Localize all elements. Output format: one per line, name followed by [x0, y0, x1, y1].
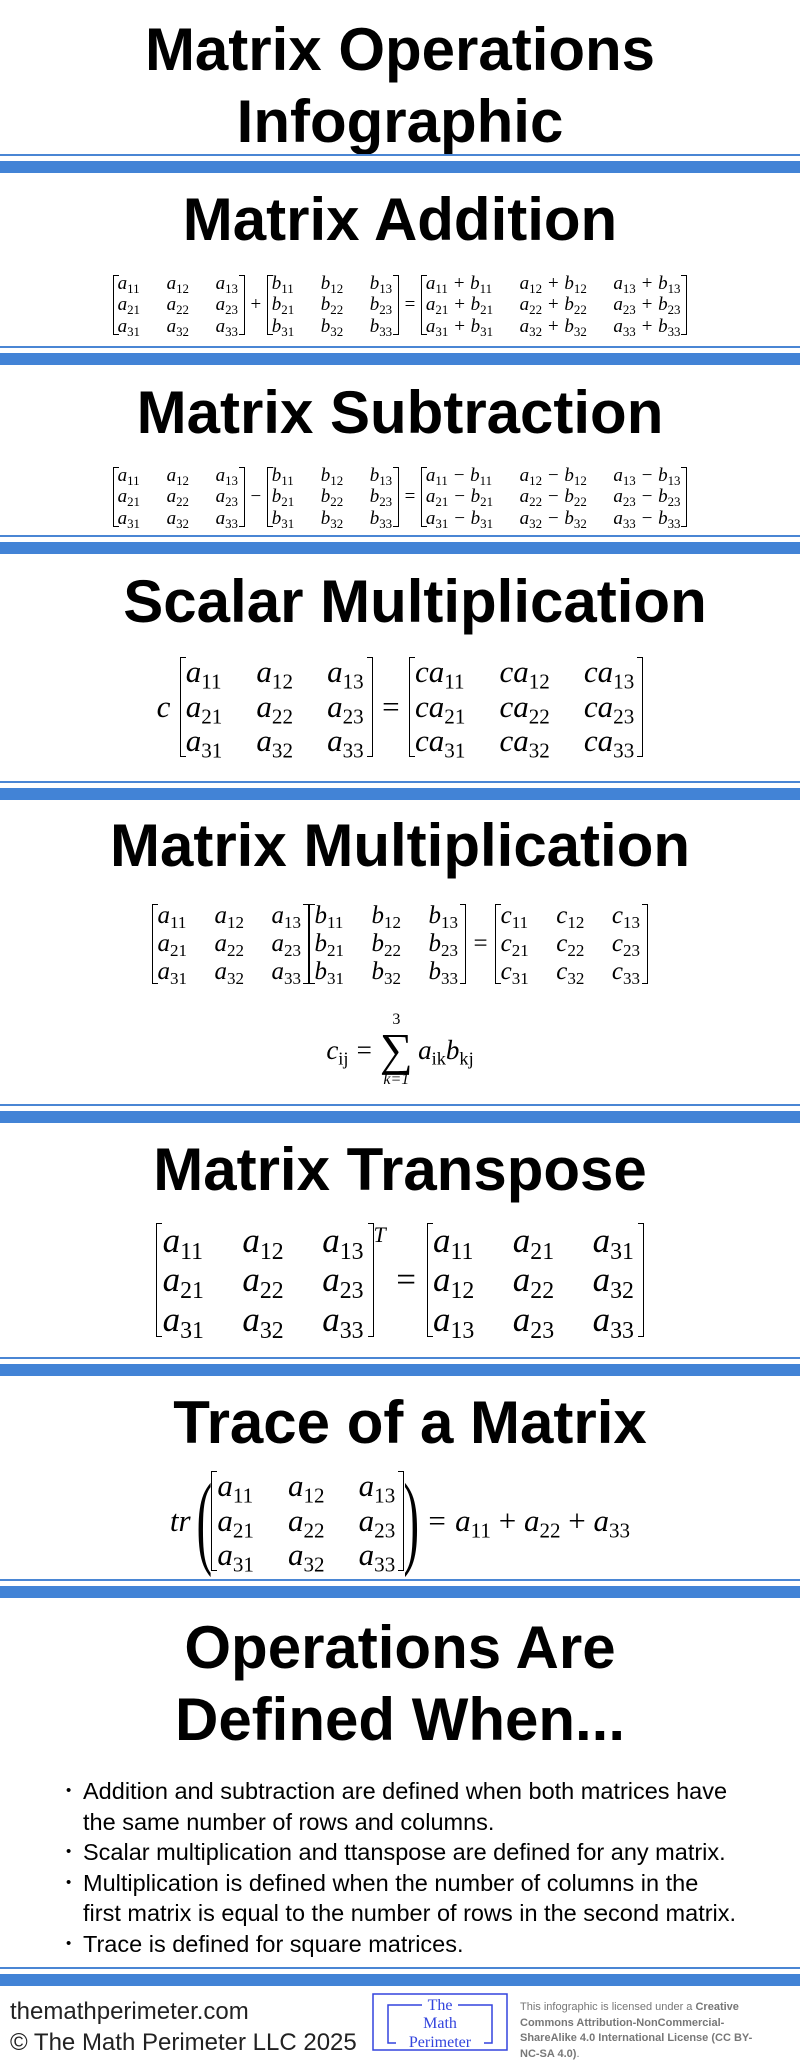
formula: subtraction: a31 − b31 [426, 508, 493, 530]
formula: transpose: a11 [433, 1221, 473, 1265]
formula: addition: a33 [216, 316, 238, 338]
formula: addition: a31 [118, 316, 140, 338]
bullet list: Multiplication is defined when the number of columns in the [83, 1870, 698, 1896]
formula: multiplication: b31 [315, 958, 344, 988]
logo: Math [423, 2015, 457, 2032]
formula: transpose: T [374, 1222, 386, 1247]
formula: scalar: a11 [186, 654, 222, 693]
formula: multiplication: b13 [429, 902, 458, 932]
formula: subtraction: a21 − b21 [426, 486, 493, 509]
formula: multiplication: a11 [158, 902, 186, 932]
formula: subtraction: b13 [370, 465, 392, 488]
formula: scalar: ca23 [584, 689, 634, 728]
footer: site and copyright: © The Math Perimeter LLC 2025 [10, 2029, 357, 2056]
formula: multiplication: b32 [372, 958, 401, 988]
formula: trace: a21 [217, 1503, 254, 1542]
formula: transpose: a22 [513, 1260, 554, 1305]
formula: addition: = [405, 294, 415, 315]
formula: transpose: a31 [163, 1300, 204, 1344]
formula: summation: k=1 [383, 1071, 409, 1088]
formula: addition: a22 [167, 294, 189, 317]
heading: transpose: Matrix Transpose [153, 1136, 647, 1203]
formula: multiplication: b21 [315, 930, 344, 960]
formula: multiplication: b12 [372, 902, 401, 932]
formula: subtraction: a21 [118, 486, 140, 509]
formula: scalar: ca21 [415, 689, 465, 728]
formula: addition: a11 + b11 [426, 273, 492, 296]
formula: scalar: a13 [327, 654, 364, 693]
formula: subtraction: a31 [118, 508, 140, 530]
formula: subtraction: b23 [370, 486, 392, 509]
heading: trace: Trace of a Matrix [173, 1389, 647, 1456]
formula: scalar: c [157, 689, 170, 724]
formula: transpose: a23 [513, 1300, 554, 1344]
heading: addition: Matrix Addition [183, 186, 617, 253]
formula: subtraction: a23 [216, 486, 238, 509]
formula: addition: a21 [118, 294, 140, 317]
formula: multiplication: c12 [556, 902, 584, 932]
formula: addition: b13 [370, 273, 392, 296]
formula: multiplication: = [474, 930, 488, 957]
formula: trace: a32 [288, 1537, 325, 1577]
formula: multiplication: a32 [215, 958, 244, 988]
formula: transpose: a21 [163, 1260, 204, 1305]
formula: transpose: a13 [433, 1300, 474, 1344]
formula: transpose: a13 [322, 1221, 364, 1265]
title: Matrix Operations [145, 16, 655, 83]
formula: addition: a22 + b22 [520, 294, 587, 317]
bullet list: Scalar multiplication and ttanspose are defined for any matrix. [83, 1839, 726, 1865]
formula: subtraction: b31 [272, 508, 294, 530]
formula: subtraction: a13 [216, 465, 238, 488]
formula: addition: a23 + b23 [613, 294, 680, 317]
formula: addition: a13 [216, 273, 238, 296]
formula: summation: 3 [392, 1011, 400, 1028]
formula: scalar: ca22 [499, 689, 550, 728]
formula: subtraction: b22 [321, 486, 343, 509]
formula: multiplication: a33 [272, 958, 301, 988]
formula: subtraction: a12 [167, 465, 189, 488]
formula: multiplication: a12 [215, 902, 244, 932]
formula: scalar: a23 [327, 689, 364, 728]
formula: trace: a12 [288, 1468, 325, 1507]
formula: summation: = [357, 1034, 372, 1064]
formula: subtraction: a33 [216, 508, 238, 530]
formula: multiplication: c33 [612, 958, 640, 988]
formula: addition: a23 [216, 294, 238, 317]
formula: multiplication: c22 [556, 930, 584, 960]
formula: subtraction: a33 − b33 [613, 508, 680, 530]
formula: subtraction: a22 [167, 486, 189, 509]
title [145, 16, 655, 155]
formula: subtraction [113, 465, 687, 530]
heading: conditions: Operations Are [184, 1614, 616, 1681]
formula: subtraction: b12 [321, 465, 343, 488]
formula: addition: b22 [321, 294, 343, 317]
formula: scalar: a12 [256, 654, 293, 693]
formula: multiplication: c31 [501, 958, 529, 988]
heading: multiplication: Matrix Multiplication [110, 812, 690, 879]
formula: subtraction: b32 [321, 508, 343, 530]
formula: addition: a31 + b31 [426, 316, 493, 338]
formula: addition: a33 + b33 [613, 316, 680, 338]
formula: scalar: ca11 [415, 654, 465, 693]
formula: transpose: a33 [593, 1300, 634, 1344]
formula: transpose: a22 [242, 1260, 284, 1305]
formula: summation: cij [326, 1034, 348, 1068]
formula: multiplication: c32 [556, 958, 584, 988]
formula: multiplication: c21 [501, 930, 529, 960]
formula: scalar: ca13 [584, 654, 634, 693]
formula: scalar: a33 [327, 723, 364, 763]
formula: transpose: a23 [322, 1260, 364, 1305]
formula: transpose: a31 [593, 1221, 634, 1265]
formula: trace: ) [404, 1463, 420, 1578]
logo: The [428, 1997, 452, 2014]
formula: transpose: a21 [513, 1221, 554, 1265]
formula: transpose: a11 [163, 1221, 203, 1265]
formula: addition: a13 + b13 [613, 273, 680, 296]
heading: conditions: Defined When... [175, 1686, 625, 1753]
logo [372, 1993, 508, 2051]
formula: trace [170, 1463, 630, 1578]
formula: transpose: = [396, 1260, 416, 1299]
formula: multiplication: b22 [372, 930, 401, 960]
formula: addition: a21 + b21 [426, 294, 493, 317]
formula: addition: + [250, 294, 261, 315]
formula: summation [326, 1011, 474, 1088]
formula: addition: a11 [118, 273, 140, 296]
formula: subtraction: b33 [370, 508, 392, 530]
bullet list: the same number of rows and columns. [83, 1808, 494, 1834]
formula: scalar: ca31 [415, 723, 465, 763]
formula: trace: a11+a22+a33 [455, 1503, 630, 1542]
bullet list: first matrix is equal to the number of rows in the second matrix. [83, 1900, 736, 1926]
heading: conditions [175, 1614, 625, 1753]
formula: subtraction: a12 − b12 [520, 465, 587, 488]
bullet list: Trace is defined for square matrices. [83, 1930, 464, 1956]
formula: addition: a12 + b12 [520, 273, 587, 296]
formula: multiplication: b33 [429, 958, 458, 988]
formula: multiplication: b11 [315, 902, 343, 932]
formula: transpose [156, 1221, 644, 1344]
formula: trace: a22 [288, 1503, 325, 1542]
footer: site and copyright [10, 1998, 357, 2056]
heading: scalar: Scalar Multiplication [123, 568, 707, 635]
formula: subtraction: a23 − b23 [613, 486, 680, 509]
formula: multiplication: a21 [158, 930, 187, 960]
formula: subtraction: a11 [118, 465, 140, 488]
formula: multiplication: a22 [215, 930, 244, 960]
formula: summation: ∑ [380, 1024, 413, 1075]
formula: subtraction: a13 − b13 [613, 465, 680, 488]
formula: subtraction: b11 [272, 465, 294, 488]
formula: scalar: ca33 [584, 723, 634, 763]
formula: addition: b32 [321, 316, 343, 338]
formula: addition: b33 [370, 316, 392, 338]
formula: trace: = [428, 1503, 446, 1538]
formula: scalar: a22 [256, 689, 293, 728]
formula: trace: a33 [359, 1537, 395, 1577]
formula: multiplication: a23 [272, 930, 301, 960]
formula: scalar: = [382, 689, 400, 724]
formula: trace: a13 [359, 1468, 395, 1507]
formula: addition: b31 [272, 316, 294, 338]
formula: scalar: a31 [186, 723, 222, 763]
formula: multiplication: b23 [429, 930, 458, 960]
formula: trace: ( [196, 1463, 212, 1578]
formula: scalar: ca32 [499, 723, 550, 763]
formula: transpose: a32 [593, 1260, 634, 1305]
formula: subtraction: − [250, 486, 261, 507]
formula: scalar: ca12 [499, 654, 550, 693]
formula: transpose: a12 [433, 1260, 474, 1305]
bullet list [66, 1778, 736, 1957]
formula: subtraction: a32 − b32 [520, 508, 587, 530]
footer: site and copyright: themathperimeter.com [10, 1998, 249, 2025]
formula: addition: b11 [272, 273, 294, 296]
formula: addition: b23 [370, 294, 392, 317]
formula: trace: tr [170, 1503, 191, 1538]
formula: trace: a23 [359, 1503, 395, 1542]
formula: multiplication: c11 [501, 902, 528, 932]
formula: multiplication [152, 902, 648, 988]
formula: trace: a31 [217, 1537, 254, 1577]
formula: scalar: a32 [256, 723, 293, 763]
formula: trace: a11 [217, 1468, 253, 1507]
formula: scalar: a21 [186, 689, 222, 728]
formula: summation: aikbkj [418, 1034, 474, 1068]
formula: subtraction: = [405, 486, 415, 507]
formula: scalar [157, 654, 643, 763]
formula: addition: b21 [272, 294, 294, 317]
formula: addition: a32 + b32 [520, 316, 587, 338]
formula: addition: a12 [167, 273, 189, 296]
formula: multiplication: c13 [612, 902, 640, 932]
formula: transpose: a33 [322, 1300, 364, 1344]
formula: addition: b12 [321, 273, 343, 296]
formula: addition [113, 273, 687, 338]
license text: This infographic is licensed under a Creative Commons Attribution-NonCommercial-ShareAlike 4.0 International License (CC BY-NC-SA 4.0). [520, 2001, 752, 2060]
formula: subtraction: b21 [272, 486, 294, 509]
formula: transpose: a32 [242, 1300, 284, 1344]
formula: subtraction: a11 − b11 [426, 465, 492, 488]
heading: subtraction: Matrix Subtraction [137, 379, 663, 446]
bullet list: Addition and subtraction are defined when both matrices have [83, 1778, 727, 1804]
formula: multiplication: c23 [612, 930, 640, 960]
formula: multiplication: a31 [158, 958, 187, 988]
formula: multiplication: a13 [272, 902, 301, 932]
title: Infographic [237, 88, 563, 155]
formula: subtraction: a32 [167, 508, 189, 530]
formula: addition: a32 [167, 316, 189, 338]
formula: transpose: a12 [242, 1221, 284, 1265]
logo: Perimeter [409, 2034, 472, 2051]
formula: subtraction: a22 − b22 [520, 486, 587, 509]
